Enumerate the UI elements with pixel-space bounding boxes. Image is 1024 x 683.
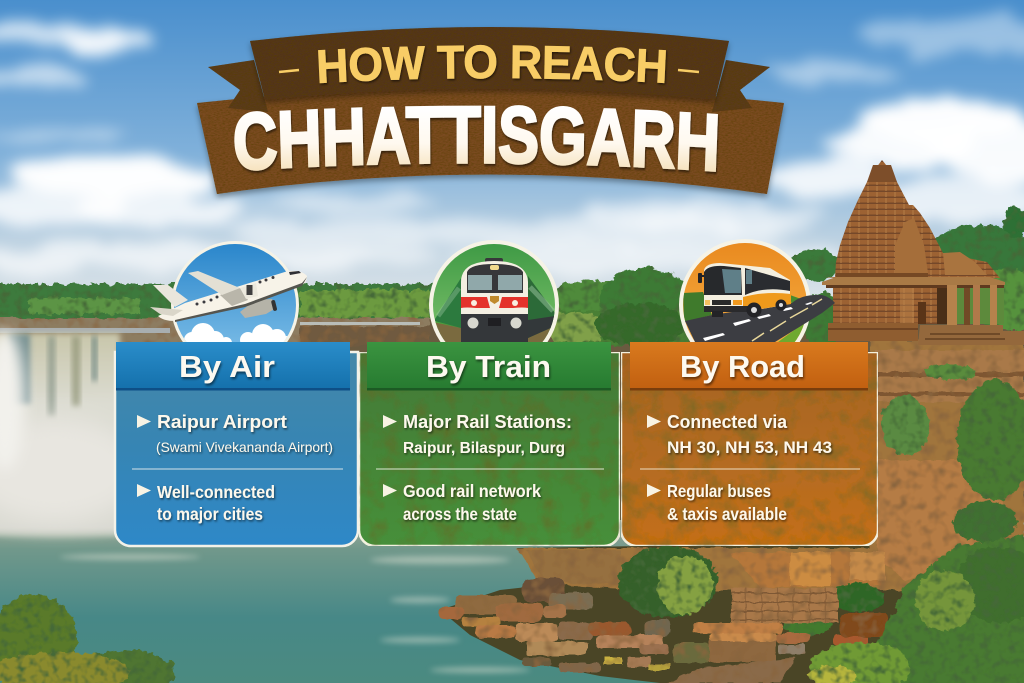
heading: chhattisgarh: CHHATTISGARH xyxy=(234,105,720,175)
heading: how to reach xyxy=(278,44,700,86)
panel header: by train xyxy=(367,342,611,390)
icon: train badge xyxy=(429,240,559,342)
title banner xyxy=(194,26,786,200)
ribbon tails xyxy=(208,60,770,112)
river xyxy=(0,520,1024,683)
stone rocks on shore xyxy=(438,578,888,683)
panel header: by road xyxy=(630,342,868,390)
temple pillars xyxy=(937,288,1004,324)
panel: by road xyxy=(621,342,878,546)
bullet list: by train: Major Rail Stations: xyxy=(403,411,572,432)
bullet list: by road xyxy=(640,411,860,524)
panel header: by road: By Road xyxy=(680,349,805,384)
bullet list: by air: Raipur Airport xyxy=(157,411,287,432)
lower wooden plank xyxy=(197,88,784,194)
bullet list: by train: Good rail network xyxy=(403,481,541,501)
bullet list: by road: & taxis available xyxy=(667,504,787,524)
cliff foliage xyxy=(618,364,1024,636)
bullet list: by road: NH 30, NH 53, NH 43 xyxy=(667,438,832,457)
icon: bus badge xyxy=(679,239,835,342)
river ripples xyxy=(0,528,530,673)
shore ground xyxy=(440,540,1024,683)
bullet list: by air: (Swami Vivekananda Airport) xyxy=(156,439,333,455)
sky background xyxy=(0,0,1024,300)
icon: airplane badge xyxy=(150,241,307,342)
clouds xyxy=(0,15,1024,273)
temple roof slab xyxy=(822,277,1005,285)
panel header: by air xyxy=(116,342,350,390)
waterfall xyxy=(0,330,140,533)
temple tower xyxy=(825,160,1000,278)
ground base xyxy=(0,300,1024,525)
rocky ledge above waterfall xyxy=(0,318,430,346)
panel header: by train: By Train xyxy=(426,349,551,384)
bullet list: by train xyxy=(376,411,604,524)
panel: by train xyxy=(359,342,620,546)
bullet list: by air xyxy=(132,411,343,524)
temple wall xyxy=(833,288,937,324)
upper wooden plank xyxy=(250,27,729,100)
foreground foliage right xyxy=(808,535,1024,683)
distant treeline xyxy=(0,206,1024,348)
bullet list: by road: Regular buses xyxy=(667,481,771,501)
panel header: by air: By Air xyxy=(179,349,275,384)
foreground foliage left xyxy=(0,594,175,683)
heading: how to reach: HOW TO REACH xyxy=(318,44,668,86)
bullet list: by train: across the state xyxy=(403,504,517,524)
cliff xyxy=(517,340,1024,590)
temple steps xyxy=(918,325,1024,345)
panel: by air xyxy=(115,342,358,546)
temple xyxy=(822,160,1024,345)
bullet list: by road: Connected via xyxy=(667,411,788,432)
bullet list: by air: Well-connected xyxy=(157,482,275,502)
bullet list: by train: Raipur, Bilaspur, Durg xyxy=(403,440,565,457)
bullet list: by air: to major cities xyxy=(157,504,263,524)
